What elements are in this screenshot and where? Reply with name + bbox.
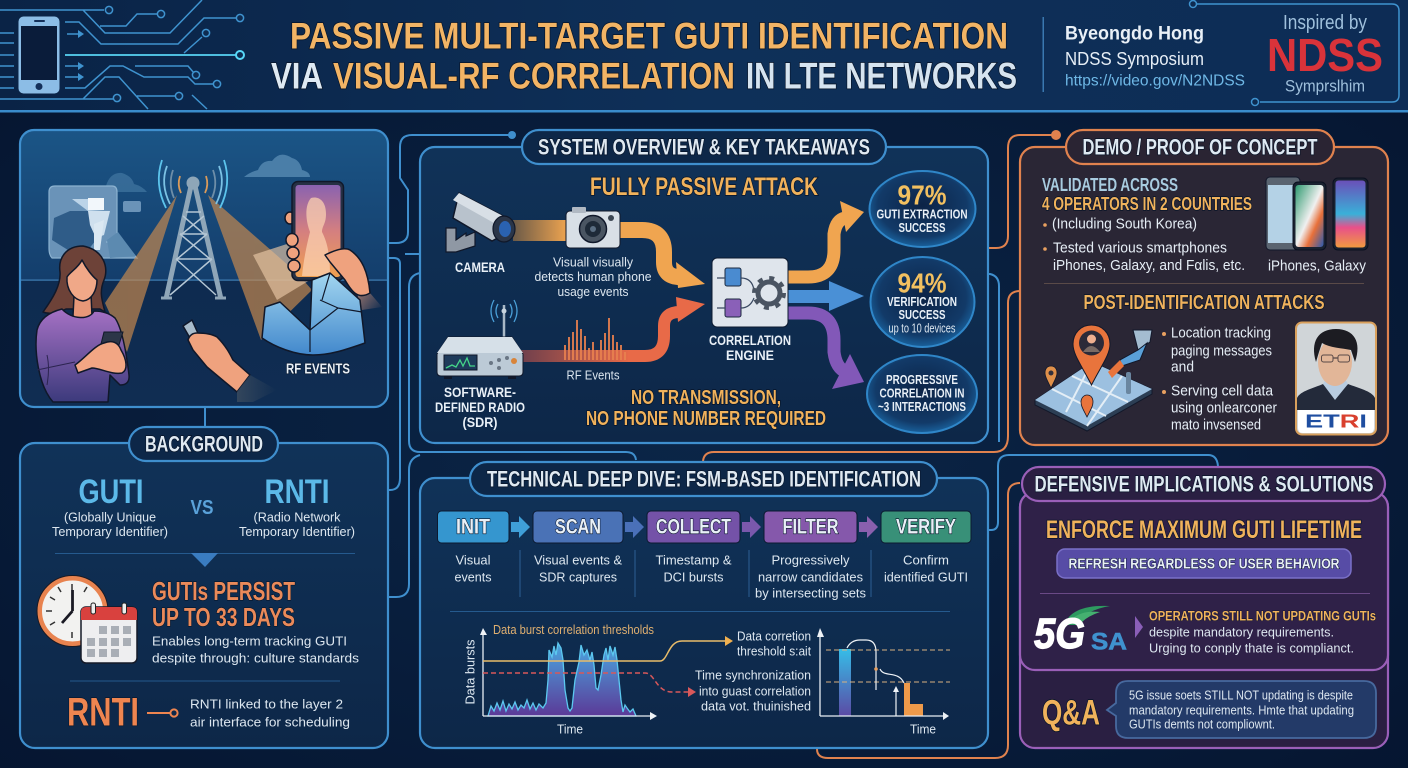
state: scan: SCAN bbox=[555, 516, 601, 538]
chart: threshold bars bbox=[817, 628, 950, 736]
icon: RF spikes bbox=[565, 318, 625, 360]
pipe: RF path bbox=[520, 297, 705, 362]
operators note: Urging to conply thate is complianct. bbox=[1149, 640, 1354, 656]
VS: VS bbox=[190, 497, 214, 519]
title: IN LTE NETWORKS bbox=[746, 56, 1017, 96]
label: camera: CAMERA bbox=[455, 259, 505, 275]
icon: software-defined radio bbox=[437, 300, 523, 379]
icon: cell tower bbox=[159, 160, 227, 299]
callout: no transmission: NO PHONE NUMBER REQUIRED bbox=[586, 408, 826, 430]
metric: 97%: 97% bbox=[898, 180, 947, 210]
divider bbox=[1042, 17, 1044, 92]
heading: fully passive: FULLY PASSIVE ATTACK bbox=[590, 173, 818, 201]
heading pill bbox=[522, 130, 886, 164]
title bbox=[271, 16, 1017, 96]
RNTI term bbox=[239, 473, 355, 539]
icon: photo camera bbox=[566, 207, 620, 248]
connectors bbox=[205, 130, 1218, 758]
chart annotations: data vot. thuinished bbox=[701, 698, 811, 714]
logo: 5G SA: SA bbox=[1091, 628, 1127, 656]
icon: abstract building bbox=[49, 186, 141, 258]
chart: data bursts over time: Data burst correlation thresholds bbox=[493, 623, 654, 637]
logo: NDSS: Symprslhim bbox=[1285, 76, 1365, 96]
panel: technical deep dive bbox=[420, 462, 988, 748]
state descriptions: DCI bursts bbox=[664, 570, 724, 584]
heading: post-identification: POST-IDENTIFICATION ATTACKS bbox=[1084, 292, 1324, 314]
chart annotations: threshold s:ait bbox=[737, 644, 811, 658]
person: woman with phone bbox=[36, 246, 129, 402]
state descriptions: SDR captures bbox=[539, 570, 617, 584]
metric: 94%: 94% bbox=[898, 268, 947, 298]
heading pill bbox=[1066, 130, 1334, 164]
title: VISUAL-RF CORRELATION bbox=[333, 56, 735, 96]
callout: no transmission bbox=[586, 387, 826, 430]
state descriptions: Timestamp & bbox=[656, 552, 732, 568]
metric: 94%: up to 10 devices bbox=[888, 320, 956, 336]
icon: correlation engine bbox=[712, 258, 788, 327]
chart: data bursts over time: Data bursts bbox=[462, 639, 478, 704]
label: correlation engine: CORRELATION bbox=[709, 332, 791, 348]
visual caption: usage events bbox=[558, 284, 629, 299]
output arrows bbox=[787, 201, 864, 389]
chart: data bursts over time bbox=[462, 623, 733, 736]
state: init: INIT bbox=[456, 516, 490, 538]
state descriptions: Confirm bbox=[903, 552, 949, 568]
RNTI note: air interface for scheduling bbox=[190, 714, 350, 730]
metric: 94%: VERIFICATION bbox=[887, 295, 957, 309]
logo: 5G SA bbox=[1034, 606, 1127, 658]
RNTI note: RNTI bbox=[67, 690, 139, 734]
author block: https://video.gov/N2NDSS bbox=[1065, 72, 1245, 90]
state descriptions bbox=[454, 550, 968, 600]
speech bubble: GUTIs demts not compliownt. bbox=[1129, 716, 1275, 732]
logo frame bbox=[1190, 0, 1399, 106]
operators note: despite mandatory requirements. bbox=[1149, 624, 1334, 640]
icon: security camera bbox=[446, 193, 515, 252]
person: hand with device bbox=[183, 320, 277, 402]
icon: smartphone bbox=[18, 16, 60, 94]
label: SDR: SOFTWARE- bbox=[444, 384, 516, 400]
GUTI persistence callout bbox=[152, 576, 360, 666]
metric: progressive correlation bbox=[867, 355, 977, 433]
attack bullets: Serving cell data bbox=[1171, 382, 1274, 400]
chart annotations: Data corretion bbox=[737, 628, 811, 644]
speech bubble: 5G issue soets STILL NOT updating is despite bbox=[1129, 688, 1353, 702]
attack bullets: using onlearconer bbox=[1171, 400, 1277, 416]
heading pill bbox=[129, 427, 278, 461]
GUTI term bbox=[52, 473, 168, 539]
metric: 94%: SUCCESS bbox=[898, 308, 946, 322]
callout: no transmission: NO TRANSMISSION, bbox=[631, 387, 781, 409]
RNTI term: RNTI bbox=[264, 473, 330, 511]
author block: Byeongdo Hong bbox=[1065, 24, 1204, 44]
validation text: (Including South Korea) bbox=[1052, 216, 1197, 232]
state descriptions: narrow candidates bbox=[758, 570, 863, 584]
label: SDR: (SDR) bbox=[462, 414, 498, 430]
state: collect bbox=[647, 511, 740, 543]
icon: circuit traces bbox=[0, 0, 244, 109]
chart annotations: Time synchronization bbox=[695, 668, 811, 682]
GUTI persistence callout: Enables long-term tracking GUTI bbox=[152, 634, 347, 648]
label: correlation engine: ENGINE bbox=[726, 347, 774, 363]
RNTI term: (Radio Network bbox=[254, 510, 341, 524]
signal arcs bbox=[159, 160, 227, 208]
metric: 94% bbox=[870, 257, 974, 347]
logo: NDSS: Inspired by bbox=[1283, 12, 1367, 34]
visual caption: detects human phone bbox=[534, 269, 652, 284]
panel: defensive implications bbox=[1020, 467, 1388, 670]
button: refresh bbox=[1057, 549, 1351, 578]
logo: NDSS bbox=[1267, 12, 1383, 96]
RNTI note: RNTI linked to the layer 2 bbox=[190, 696, 343, 712]
GUTI persistence callout: GUTIs PERSIST bbox=[152, 576, 295, 606]
portrait with ETRI badge bbox=[1296, 322, 1376, 434]
heading pill bbox=[1022, 467, 1385, 501]
state: collect: COLLECT bbox=[656, 516, 731, 538]
validation text: iPhones, Galaxy, and Fαlis, etc. bbox=[1053, 257, 1245, 274]
panel: background bbox=[20, 427, 388, 748]
pipe: visual path bbox=[513, 220, 705, 288]
state: verify: VERIFY bbox=[896, 516, 956, 538]
GUTI term: (Globally Unique bbox=[64, 510, 156, 524]
heading pill: BACKGROUND bbox=[145, 432, 263, 456]
attack bullets: mato invsensed bbox=[1171, 416, 1261, 434]
visual caption bbox=[534, 254, 652, 299]
Q&A heading: Q&A bbox=[1042, 694, 1100, 732]
GUTI term: GUTI bbox=[78, 473, 144, 511]
state flow bbox=[438, 511, 971, 543]
label: RF events: RF EVENTS bbox=[286, 360, 350, 378]
metric: progressive correlation: PROGRESSIVE bbox=[886, 373, 958, 387]
label: RF events: RF Events bbox=[566, 368, 620, 382]
attack bullets: Location tracking bbox=[1171, 324, 1271, 342]
metric: progressive correlation: ~3 INTERACTIONS bbox=[878, 400, 966, 414]
portrait with ETRI badge: ET R I bbox=[1305, 412, 1367, 432]
heading pill: SYSTEM OVERVIEW & KEY TAKEAWAYS bbox=[538, 134, 870, 160]
panel: hero illustration bbox=[20, 130, 388, 407]
state descriptions: Progressively bbox=[772, 552, 850, 568]
validation text: VALIDATED ACROSS bbox=[1042, 175, 1178, 195]
state: scan bbox=[533, 511, 623, 543]
clouds bbox=[92, 155, 310, 192]
heading pill bbox=[470, 462, 937, 496]
chart: threshold bars: Time bbox=[910, 722, 936, 736]
label: SDR bbox=[435, 384, 525, 430]
speech bubble: mandatory requirements. Hmte that updating bbox=[1129, 702, 1354, 718]
button: refresh: REFRESH REGARDLESS OF USER BEHAVIOR bbox=[1068, 556, 1340, 572]
icon: phones bbox=[1266, 177, 1368, 250]
state descriptions: by intersecting sets bbox=[755, 586, 866, 600]
visual caption: Visuall visually bbox=[553, 254, 633, 270]
state: filter: FILTER bbox=[782, 516, 838, 538]
operators note bbox=[1149, 608, 1376, 656]
chart annotations: into guast correlation bbox=[699, 684, 811, 698]
label: correlation engine bbox=[709, 332, 791, 363]
state: verify bbox=[881, 511, 971, 543]
validation text: 4 OPERATORS IN 2 COUNTRIES bbox=[1042, 194, 1252, 214]
validation text: Tested various smartphones bbox=[1053, 240, 1227, 256]
state: init bbox=[438, 511, 509, 543]
arrow: purple bbox=[1135, 616, 1143, 638]
state descriptions: events bbox=[454, 570, 492, 584]
speech bubble bbox=[1107, 681, 1376, 738]
GUTI persistence callout: despite through: culture standards bbox=[152, 650, 360, 666]
arrow: down wedge bbox=[55, 553, 355, 567]
heading pill: DEMO / PROOF OF CONCEPT bbox=[1082, 134, 1318, 160]
chart annotations bbox=[695, 628, 811, 714]
state descriptions: Visual events & bbox=[534, 552, 622, 568]
RF beams bbox=[105, 195, 312, 352]
state: filter bbox=[764, 511, 857, 543]
RNTI note bbox=[67, 690, 350, 734]
RNTI term: Temporary Identifier) bbox=[239, 524, 355, 539]
logo: NDSS: NDSS bbox=[1267, 29, 1383, 81]
GUTI term: Temporary Identifier) bbox=[52, 524, 168, 539]
author block bbox=[1065, 24, 1245, 90]
metric: 97%: SUCCESS bbox=[898, 221, 946, 235]
person: raised phone with hand bbox=[253, 182, 382, 355]
GUTI persistence callout: UP TO 33 DAYS bbox=[152, 602, 295, 632]
validation text bbox=[1042, 175, 1252, 274]
attack bullets: paging messages bbox=[1171, 342, 1272, 360]
label: SDR: DEFINED RADIO bbox=[435, 399, 525, 415]
metric: 97%: GUTI EXTRACTION bbox=[876, 208, 968, 222]
chart: data bursts over time: Time bbox=[557, 722, 583, 736]
panel: demo bbox=[1020, 130, 1388, 445]
author block: NDSS Symposium bbox=[1065, 49, 1204, 69]
heading pill: TECHNICAL DEEP DIVE: FSM-BASED IDENTIFICATION bbox=[487, 466, 921, 492]
state descriptions: identified GUTI bbox=[884, 570, 968, 584]
title: PASSIVE MULTI-TARGET GUTI IDENTIFICATION bbox=[290, 16, 1008, 56]
metric: progressive correlation: CORRELATION IN bbox=[880, 386, 964, 400]
icon: clock and calendar bbox=[37, 576, 137, 663]
panel: Q&A bbox=[1020, 492, 1388, 748]
state descriptions: Visual bbox=[456, 552, 491, 568]
label: phones: iPhones, Galaxy bbox=[1268, 258, 1366, 274]
logo: 5G SA: 5G bbox=[1034, 610, 1085, 658]
header band bbox=[0, 0, 1408, 112]
title: VIA bbox=[271, 56, 323, 96]
attack bullets: and bbox=[1171, 358, 1194, 376]
panel: system overview bbox=[420, 130, 988, 443]
icon: map with location pins bbox=[1035, 325, 1152, 431]
attack bullets bbox=[1162, 324, 1277, 434]
metric: 97% bbox=[870, 171, 976, 247]
